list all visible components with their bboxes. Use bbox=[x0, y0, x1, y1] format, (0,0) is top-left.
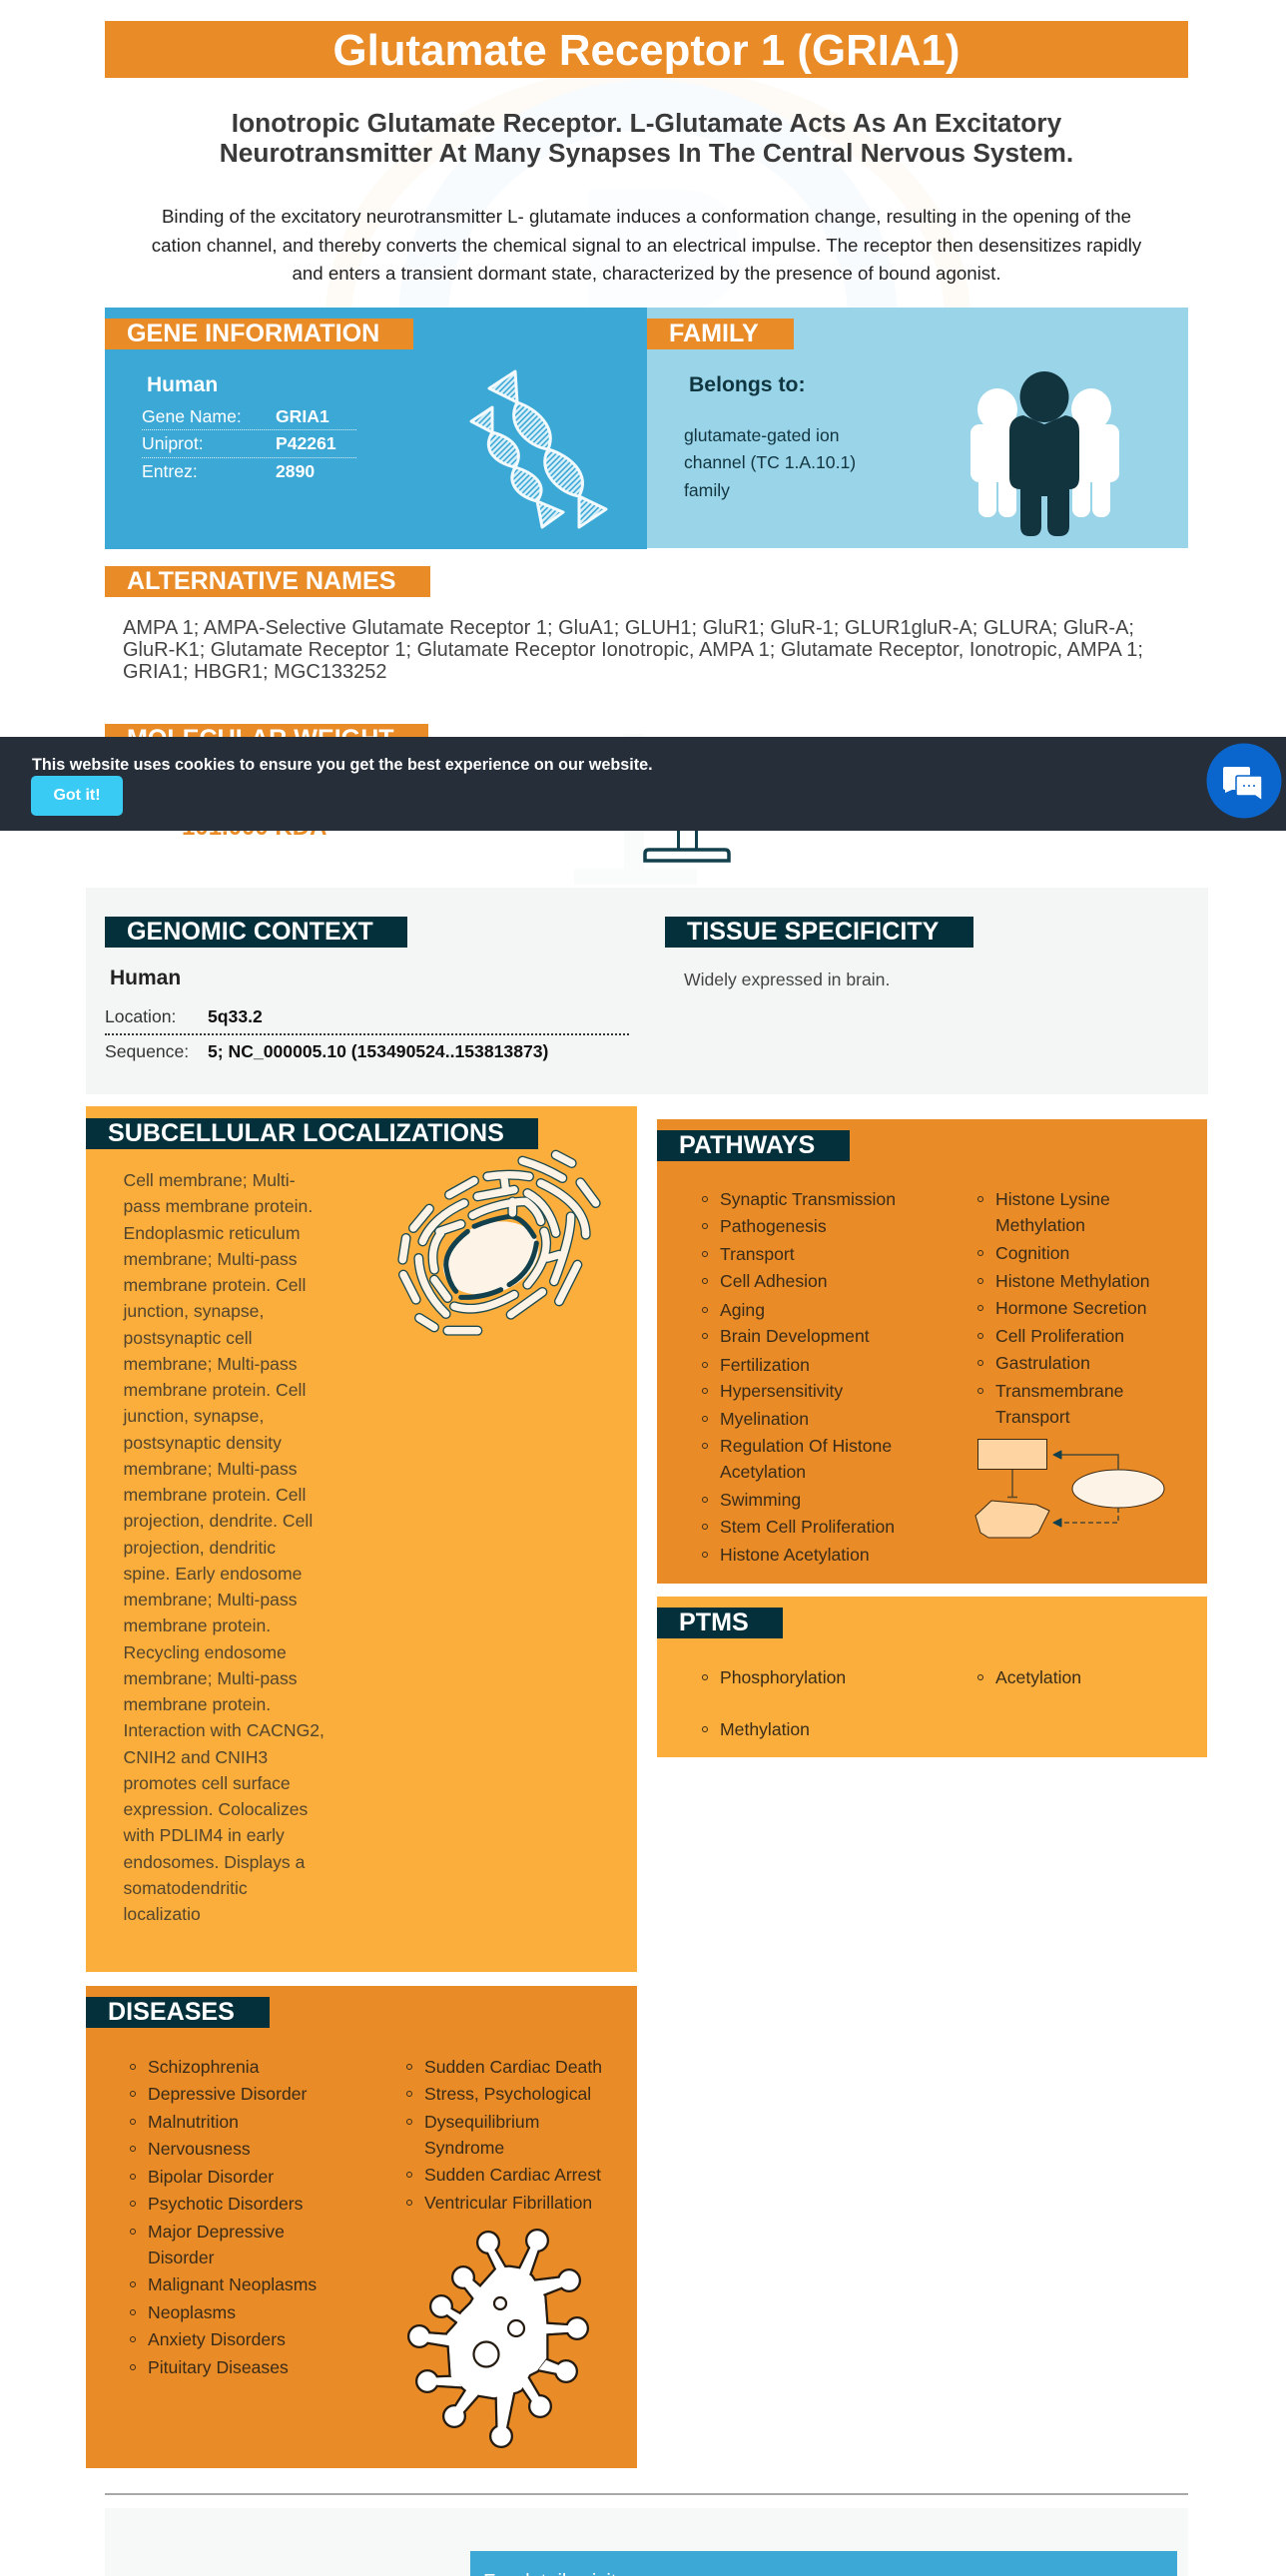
heading: pathways: PATHWAYS bbox=[679, 1131, 815, 1159]
localization text: Endoplasmic reticulum bbox=[124, 1222, 300, 1242]
diseases list: column 2: Sudden Cardiac Arrest bbox=[424, 2165, 601, 2185]
tissue specificity text: Widely expressed in brain. bbox=[684, 969, 890, 989]
pathways list: column 2: Hormone Secretion bbox=[995, 1298, 1147, 1318]
heading: alternative names: ALTERNATIVE NAMES bbox=[127, 567, 396, 595]
diseases list: column 1 bbox=[130, 2057, 317, 2377]
heading: ptms: PTMS bbox=[679, 1609, 749, 1636]
heading: tissue specificity: TISSUE SPECIFICITY bbox=[687, 918, 939, 946]
alternative names text bbox=[123, 617, 1143, 683]
belongs to label: Belongs to: bbox=[689, 373, 806, 396]
icon: pathway diagram bbox=[974, 1439, 1164, 1538]
gene data rows: 2890 bbox=[276, 461, 315, 481]
gene data rows: Gene Name: bbox=[142, 406, 242, 426]
panel: diseases bbox=[86, 1986, 637, 2468]
localization text: membrane; Multi-pass bbox=[124, 1354, 298, 1374]
diseases list: column 2: Stress, Psychological bbox=[424, 2084, 591, 2104]
pathways list: column 1: Brain Development bbox=[720, 1326, 870, 1346]
heading: diseases: DISEASES bbox=[108, 1998, 235, 2026]
subtitle: Neurotransmitter At Many Synapses In The Central Nervous System. bbox=[220, 138, 1073, 168]
location row: Location: bbox=[105, 1006, 176, 1026]
family description: glutamate-gated ion bbox=[684, 425, 840, 445]
heading: molecular weight: MOLECULAR WEIGHT bbox=[127, 725, 394, 753]
localization text: membrane; Multi-pass bbox=[124, 1249, 298, 1269]
heading: gene information: GENE INFORMATION bbox=[127, 320, 379, 347]
diseases list: column 1: Anxiety Disorders bbox=[148, 2329, 286, 2349]
localization text: projection, dendritic bbox=[124, 1538, 276, 1558]
pathways list: column 1: Hypersensitivity bbox=[720, 1381, 843, 1401]
panel: footer bbox=[105, 2508, 1188, 2576]
panel: genomic context and tissue specificity bbox=[86, 888, 1208, 1094]
localization text: localizatio bbox=[124, 1904, 201, 1924]
localization text: promotes cell surface bbox=[124, 1773, 291, 1793]
diseases list: column 1: Pituitary Diseases bbox=[148, 2357, 289, 2377]
localization text: junction, synapse, bbox=[124, 1406, 264, 1426]
pathways list: column 1: Fertilization bbox=[720, 1354, 810, 1374]
heading: ptms bbox=[657, 1608, 783, 1638]
pathways list: column 2: Methylation bbox=[995, 1215, 1085, 1235]
diseases list: column 2 bbox=[406, 2057, 602, 2213]
gene data rows: Uniprot: bbox=[142, 433, 204, 453]
diseases list: column 1: Bipolar Disorder bbox=[148, 2167, 274, 2187]
ptm item: acetylation: Acetylation bbox=[995, 1667, 1081, 1687]
pathways list: column 1: Cell Adhesion bbox=[720, 1271, 828, 1291]
localization text: pass membrane protein. bbox=[124, 1196, 313, 1216]
pathways list: column 2 bbox=[977, 1189, 1150, 1426]
heading: pathways bbox=[657, 1130, 850, 1161]
ptm item: phosphorylation: Phosphorylation bbox=[720, 1667, 846, 1687]
species label: Human bbox=[110, 966, 181, 989]
diseases list: column 1: Disorder bbox=[148, 2248, 214, 2267]
localization text bbox=[123, 1170, 324, 1924]
diseases list: column 2: Dysequilibrium bbox=[424, 2112, 539, 2132]
localization text: Cell membrane; Multi- bbox=[124, 1170, 296, 1190]
diseases list: column 2: Sudden Cardiac Death bbox=[424, 2057, 602, 2077]
description paragraph bbox=[152, 206, 1142, 284]
localization text: membrane protein. bbox=[124, 1694, 271, 1714]
diseases list: column 1: Malignant Neoplasms bbox=[148, 2274, 317, 2294]
localization text: CNIH2 and CNIH3 bbox=[124, 1747, 268, 1767]
family description: channel (TC 1.A.10.1) bbox=[684, 452, 856, 472]
sequence value: 5; NC_000005.10 (153490524..153813873) bbox=[208, 1041, 548, 1061]
localization text: junction, synapse, bbox=[124, 1301, 264, 1321]
diseases list: column 2: Ventricular Fibrillation bbox=[424, 2193, 592, 2213]
pathways list: column 1: Synaptic Transmission bbox=[720, 1189, 896, 1209]
localization text: endosomes. Displays a bbox=[124, 1851, 305, 1871]
heading: genomic context: GENOMIC CONTEXT bbox=[127, 918, 373, 946]
localization text: Interaction with CACNG2, bbox=[124, 1720, 324, 1740]
icon: virus bbox=[407, 2229, 589, 2448]
icon: people bbox=[970, 371, 1119, 536]
diseases list: column 1: Nervousness bbox=[148, 2139, 251, 2159]
pathways list: column 1: Acetylation bbox=[720, 1462, 806, 1482]
localization text: postsynaptic density bbox=[124, 1432, 282, 1452]
localization text: expression. Colocalizes bbox=[124, 1799, 308, 1819]
localization text: projection, dendrite. Cell bbox=[124, 1511, 313, 1531]
icon: computer monitor bbox=[643, 831, 731, 863]
pathways list: column 2: Gastrulation bbox=[995, 1352, 1090, 1372]
diseases list: column 1: Neoplasms bbox=[148, 2302, 236, 2322]
pathways list: column 1: Histone Acetylation bbox=[720, 1544, 870, 1564]
diseases list: column 1: Psychotic Disorders bbox=[148, 2194, 303, 2214]
diseases list: column 1: Malnutrition bbox=[148, 2112, 239, 2132]
pathways list: column 1: Transport bbox=[720, 1244, 795, 1264]
pathways list: column 2: Cognition bbox=[995, 1243, 1069, 1263]
panel: pathways bbox=[657, 1119, 1207, 1584]
molecular weight value: 101.000 KDA bbox=[182, 814, 326, 841]
localization text: membrane; Multi-pass bbox=[124, 1459, 298, 1479]
cookie banner bbox=[0, 737, 1286, 831]
title: Glutamate Receptor 1 (GRIA1) bbox=[333, 26, 960, 75]
pathways list: column 1: Regulation Of Histone bbox=[720, 1436, 892, 1456]
localization text: membrane; Multi-pass bbox=[124, 1668, 298, 1688]
localization text: membrane protein. bbox=[124, 1615, 271, 1635]
localization text: membrane protein. Cell bbox=[124, 1485, 306, 1505]
pathways list: column 2: Cell Proliferation bbox=[995, 1326, 1124, 1346]
pathways list: column 1: Stem Cell Proliferation bbox=[720, 1516, 895, 1536]
alternative names text: GRIA1; HBGR1; MGC133252 bbox=[123, 661, 387, 683]
pathways list: column 1: Myelination bbox=[720, 1408, 809, 1428]
panel: subcellular localizations bbox=[86, 1106, 637, 1972]
icon: cell with endoplasmic reticulum bbox=[397, 1150, 601, 1336]
localization text: with PDLIM4 in early bbox=[124, 1825, 285, 1845]
pathways list: column 1: Aging bbox=[720, 1300, 765, 1320]
pathways list: column 1: Swimming bbox=[720, 1490, 801, 1510]
icon: dna bbox=[469, 369, 607, 529]
family description: family bbox=[684, 479, 730, 499]
button: got it bbox=[31, 776, 123, 816]
sequence row: Sequence: bbox=[105, 1041, 189, 1061]
pathways list: column 2: Transport bbox=[995, 1406, 1070, 1426]
cookie message: This website uses cookies to ensure you get the best experience on our website. bbox=[32, 756, 653, 774]
localization text: spine. Early endosome bbox=[124, 1564, 302, 1584]
pathways list: column 2: Histone Methylation bbox=[995, 1270, 1150, 1290]
diseases list: column 2: Syndrome bbox=[424, 2138, 504, 2158]
diseases list: column 1: Major Depressive bbox=[148, 2222, 285, 2242]
pathways list: column 1: Pathogenesis bbox=[720, 1216, 827, 1236]
pathways list: column 1 bbox=[702, 1189, 896, 1564]
description paragraph: and enters a transient dormant state, characterized by the presence of bound agonist. bbox=[292, 263, 1001, 284]
watermark logo bbox=[325, 78, 970, 308]
gene data rows bbox=[142, 406, 356, 481]
diseases list: column 1: Schizophrenia bbox=[148, 2057, 260, 2077]
pathways list: column 2: Transmembrane bbox=[995, 1380, 1123, 1400]
localization text: membrane protein. Cell bbox=[124, 1275, 306, 1295]
alternative names text: AMPA 1; AMPA-Selective Glutamate Receptor 1; GluA1; GLUH1; GluR1; GluR-1; GLUR1gluR-A; GLURA; GluR-A; bbox=[123, 617, 1134, 639]
location value: 5q33.2 bbox=[208, 1006, 263, 1026]
gene data rows: Entrez: bbox=[142, 461, 198, 481]
heading: diseases bbox=[86, 1997, 270, 2028]
title bbox=[105, 21, 1188, 78]
localization text: membrane protein. Cell bbox=[124, 1380, 306, 1400]
localization text: postsynaptic cell bbox=[124, 1328, 253, 1348]
localization text: Recycling endosome bbox=[124, 1641, 287, 1661]
alternative names text: GluR-K1; Glutamate Receptor 1; Glutamate Receptor Ionotropic, AMPA 1; Glutamate Receptor, Ionotropic, AMPA 1; bbox=[123, 639, 1143, 661]
description paragraph: cation channel, and thereby converts the chemical signal to an electrical impulse. The receptor then desensitizes rapidly bbox=[152, 234, 1141, 256]
species label: Human bbox=[147, 373, 218, 396]
footer divider bbox=[105, 2493, 1188, 2495]
description paragraph: Binding of the excitatory neurotransmitter L- glutamate induces a conformation change, resulting in the opening of the bbox=[162, 206, 1131, 227]
panel: ptms bbox=[657, 1597, 1207, 1757]
subtitle bbox=[220, 108, 1073, 168]
heading: family bbox=[647, 319, 794, 349]
heading: subcellular localizations: SUBCELLULAR LOCALIZATIONS bbox=[108, 1119, 504, 1147]
subtitle: Ionotropic Glutamate Receptor. L-Glutamate Acts As An Excitatory bbox=[232, 108, 1061, 138]
localization text: somatodendritic bbox=[124, 1878, 248, 1898]
gene data rows: GRIA1 bbox=[276, 406, 329, 426]
icon: chat bubble bbox=[1206, 743, 1282, 819]
gene data rows: P42261 bbox=[276, 433, 336, 453]
ptm item: methylation: Methylation bbox=[720, 1719, 810, 1739]
family description bbox=[684, 425, 856, 499]
panel: gene information bbox=[105, 308, 647, 549]
diseases list: column 1: Depressive Disorder bbox=[148, 2084, 307, 2104]
button: got it: Got it! bbox=[53, 787, 101, 804]
localization text: membrane; Multi-pass bbox=[124, 1590, 298, 1610]
panel: family bbox=[647, 308, 1188, 548]
heading: family: FAMILY bbox=[669, 320, 759, 347]
pathways list: column 2: Histone Lysine bbox=[995, 1189, 1110, 1209]
panel: details link box bbox=[470, 2551, 1177, 2576]
